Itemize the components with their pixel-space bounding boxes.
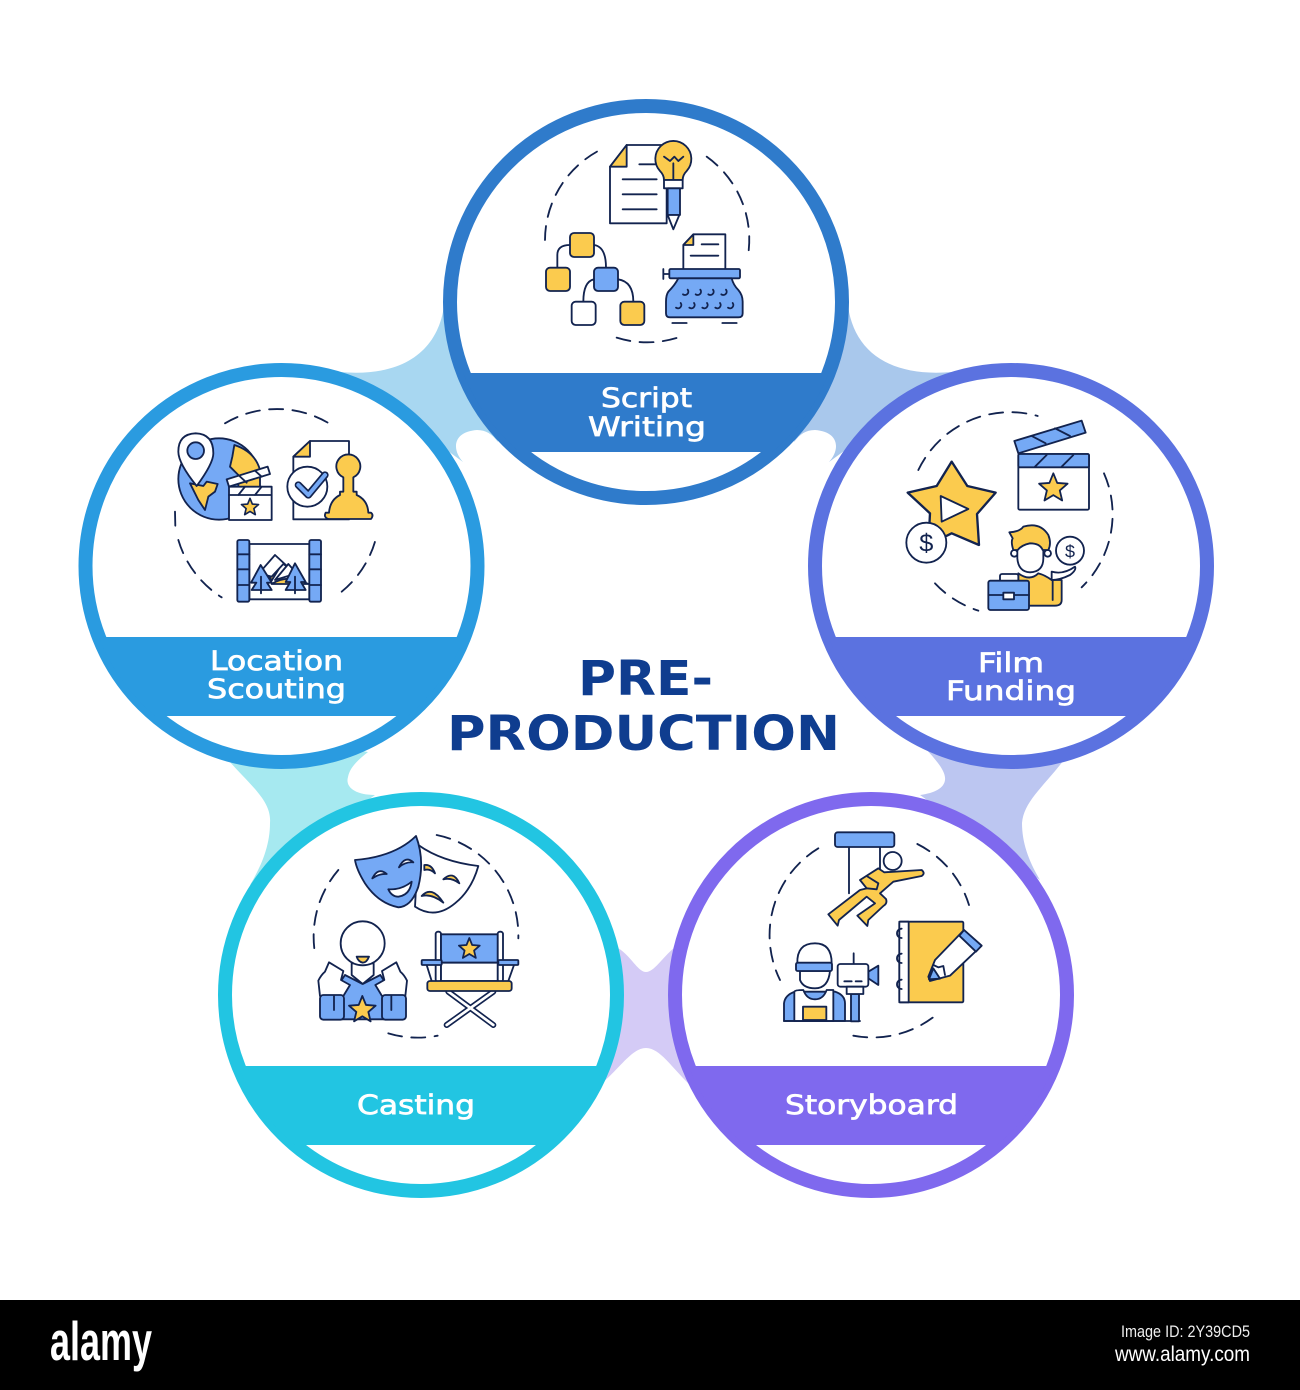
label band: storyboard: Storyboard (785, 1090, 958, 1121)
footer bar: alamy (50, 1310, 152, 1372)
icons: film funding (906, 412, 1113, 611)
label band: script writing: Writing (588, 412, 706, 443)
label band: casting: Casting (357, 1090, 475, 1121)
panel: casting (225, 799, 617, 1191)
panel: location scouting (86, 370, 478, 762)
label band: film funding (828, 637, 1194, 716)
label band: location scouting: Scouting (207, 674, 346, 705)
title: PRE- (578, 651, 713, 707)
icons: film funding: $ (1065, 541, 1075, 561)
panel: film funding (815, 370, 1207, 762)
connector: film funding to storyboard (920, 740, 1070, 880)
title: PRODUCTION (447, 706, 840, 762)
label band: storyboard (688, 1066, 1054, 1145)
label band: casting (238, 1066, 604, 1145)
panel: script writing (450, 106, 842, 498)
label band: location scouting: Location (210, 646, 343, 677)
title (447, 651, 840, 762)
connector: location scouting to casting (218, 740, 375, 885)
label band: script writing: Script (601, 383, 692, 414)
panel: storyboard (675, 799, 1067, 1191)
icons: film funding: $ (919, 530, 933, 558)
icons: script writing (545, 141, 749, 342)
icons: storyboard (770, 832, 982, 1037)
label band: script writing (463, 373, 829, 452)
connector: script writing to location scouting (340, 295, 498, 462)
footer bar: Image ID: 2Y39CD5 (1121, 1322, 1250, 1341)
footer bar (0, 1300, 1300, 1390)
footer bar: www.alamy.com (1114, 1343, 1250, 1366)
label band: film funding: Film (978, 648, 1044, 679)
connector: script writing to film funding (794, 295, 952, 462)
connector: casting to storyboard (603, 948, 690, 1085)
label band: film funding: Funding (946, 676, 1076, 707)
label band: location scouting (99, 637, 464, 716)
icons: casting (314, 835, 518, 1038)
icons: location scouting (175, 409, 375, 602)
